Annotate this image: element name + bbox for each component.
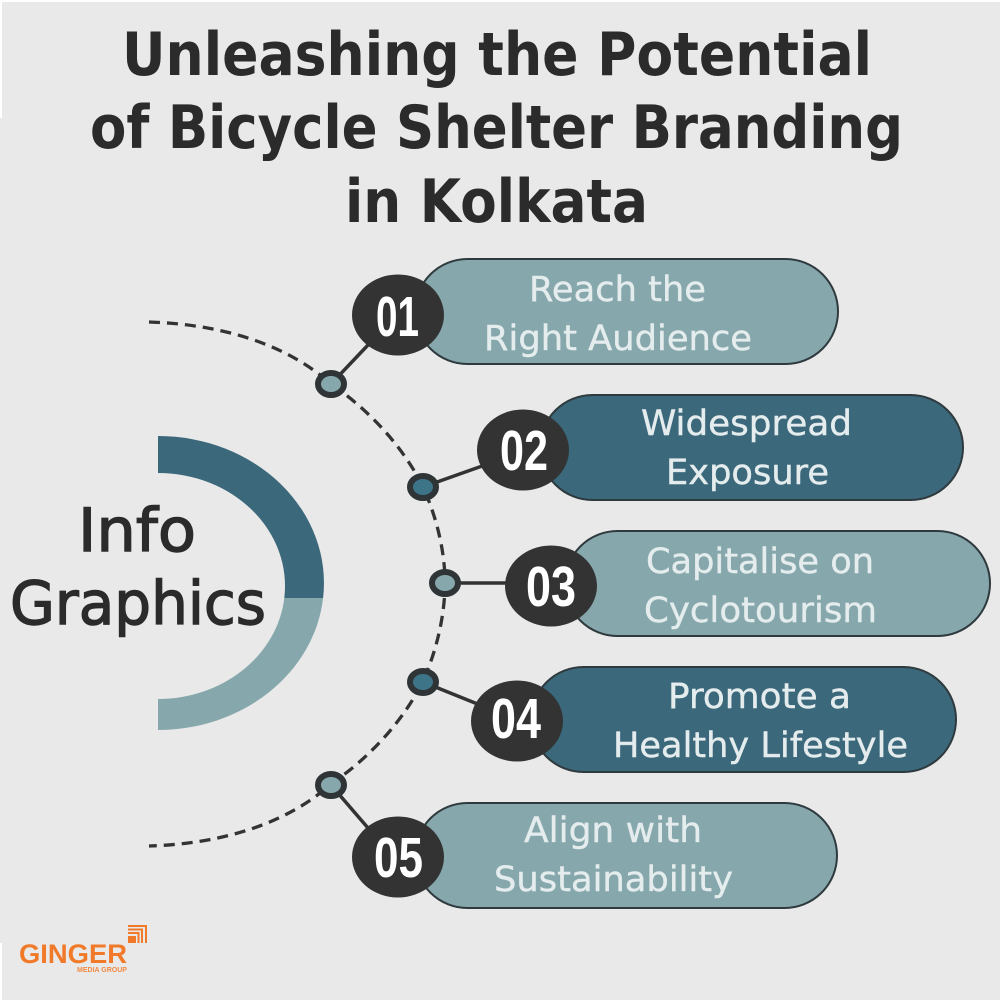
item 03: 03 xyxy=(526,555,576,619)
item 04: Healthy Lifestyle xyxy=(613,726,908,766)
item 04 xyxy=(410,667,956,772)
item 05 xyxy=(318,774,837,908)
item 01: 01 xyxy=(376,285,419,349)
center label: Info Graphics: Graphics xyxy=(10,569,266,639)
item 01 xyxy=(318,259,838,395)
half ring: two-tone semicircle xyxy=(158,436,324,730)
item 02 xyxy=(410,395,963,500)
center label: Info Graphics xyxy=(10,496,266,639)
title: Unleashing the Potential xyxy=(122,20,872,90)
item 01: Reach the xyxy=(529,270,706,310)
item 05: 05 xyxy=(374,826,423,890)
dashed arc xyxy=(149,322,445,846)
center label: Info Graphics: Info xyxy=(78,496,196,566)
item 02: Widespread xyxy=(641,404,852,444)
item 02: Exposure xyxy=(666,453,829,493)
item 04: 04 xyxy=(491,687,541,751)
title: of Bicycle Shelter Branding xyxy=(90,93,903,163)
item 05: Align with xyxy=(524,811,702,851)
logo: Ginger Media Group: GINGER xyxy=(19,939,127,969)
item 03 xyxy=(432,531,990,636)
logo: Ginger Media Group xyxy=(19,926,146,974)
title: in Kolkata xyxy=(345,167,648,237)
item 05: Sustainability xyxy=(494,860,733,900)
title xyxy=(90,20,903,237)
item 03: Cyclotourism xyxy=(644,591,877,631)
item 01: Right Audience xyxy=(484,319,752,359)
item 04: Promote a xyxy=(668,677,851,717)
logo: Ginger Media Group: MEDIA GROUP xyxy=(77,967,127,974)
item 03: Capitalise on xyxy=(646,542,874,582)
item 02: 02 xyxy=(500,419,548,483)
